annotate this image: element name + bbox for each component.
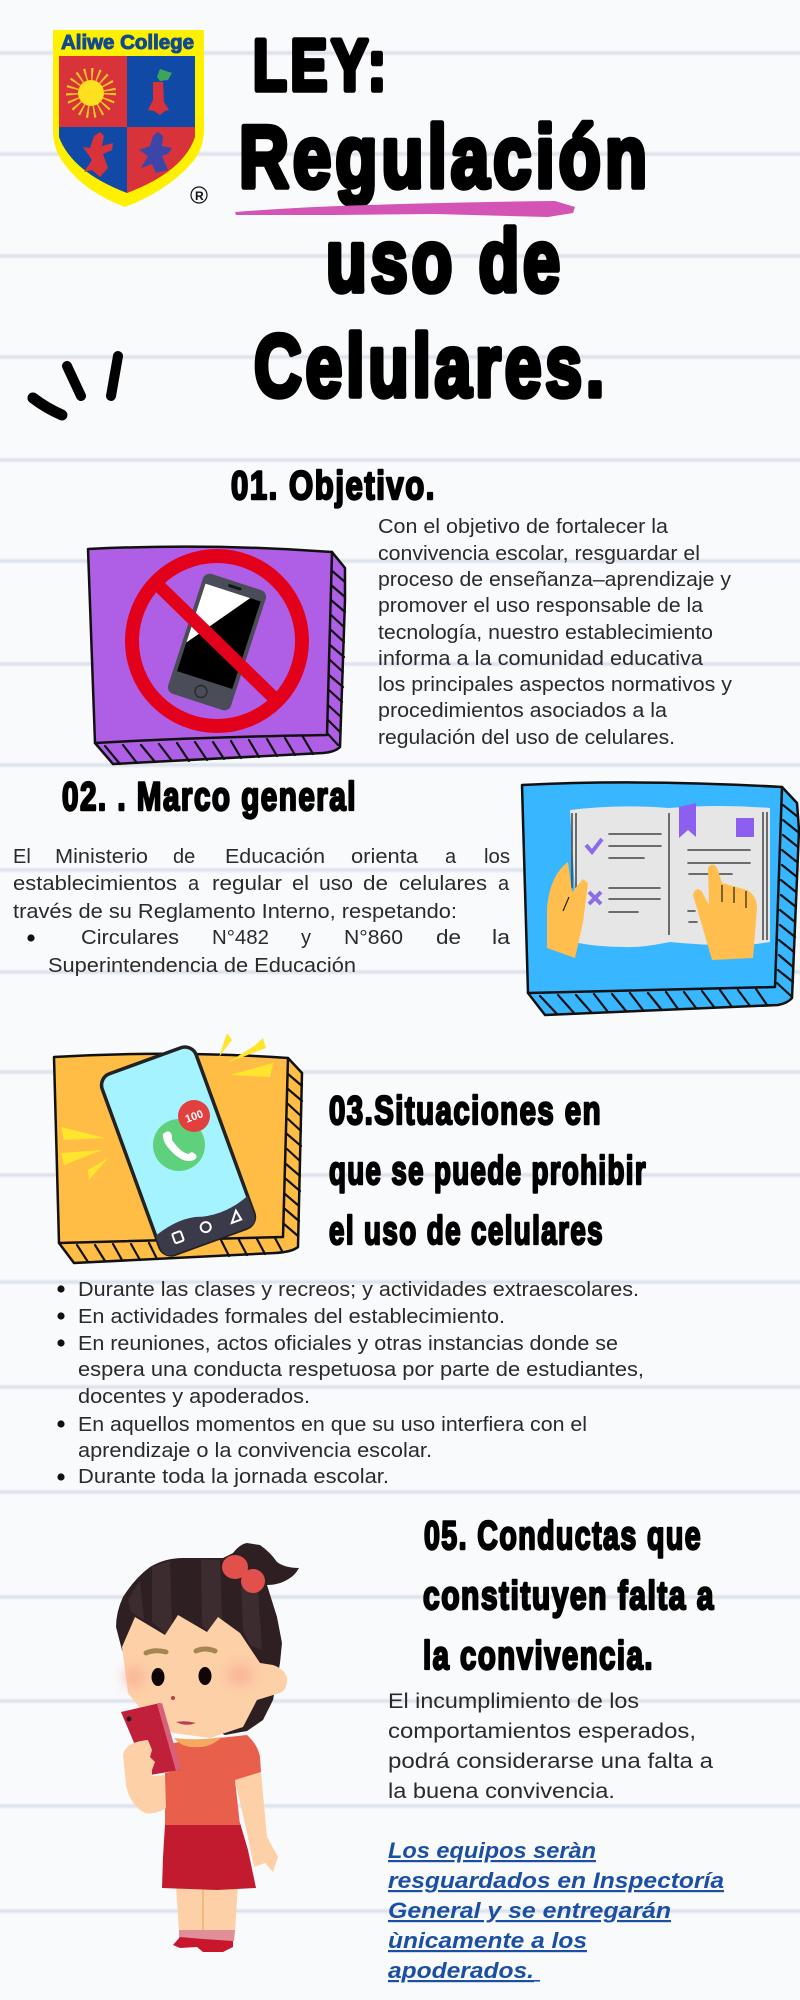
pink brush underline xyxy=(235,201,575,217)
text: conductas paragraph xyxy=(388,1690,713,1803)
list: situaciones: En actividades formales del establecimiento. xyxy=(78,1306,505,1328)
list: situaciones: docentes y apoderados. xyxy=(78,1386,310,1408)
skirt xyxy=(162,1823,256,1890)
callout: blue underlined note: ùnicamente a los xyxy=(388,1928,587,1953)
text: marco general paragraph: de xyxy=(363,873,388,895)
cheeks xyxy=(123,1666,145,1688)
text: marco general paragraph: a xyxy=(498,873,510,895)
callout: blue underlined note: apoderados. xyxy=(388,1958,534,1983)
list: situaciones: En aquellos momentos en que su uso interfiera con el xyxy=(78,1414,587,1436)
text: marco general paragraph: establecimientos xyxy=(13,873,177,895)
bullet list item: circulares: Superintendencia de Educación xyxy=(48,955,356,977)
text: objetivo paragraph: informa a la comunidad educativa xyxy=(378,648,704,670)
icon: left hand xyxy=(547,862,588,958)
bullet list item: circulares: N°482 xyxy=(212,927,269,949)
nose and mouth xyxy=(171,1696,175,1700)
title: LEY: xyxy=(253,26,390,106)
list: situaciones: espera una conducta respetuosa por parte de estudiantes, xyxy=(78,1359,644,1381)
right arm xyxy=(235,1772,278,1872)
text: marco general paragraph: de xyxy=(173,846,195,868)
text: objetivo paragraph: tecnología, nuestro establecimiento xyxy=(378,622,713,644)
text: objetivo paragraph: procedimientos asociados a la xyxy=(378,700,668,722)
callout: blue underlined note xyxy=(388,1838,724,1983)
icon: no phones purple box xyxy=(88,547,345,764)
icon: yellow sparks xyxy=(61,1033,273,1180)
title: uso de xyxy=(326,211,564,310)
heading: 03 situaciones: 03.Situaciones en xyxy=(329,1089,602,1133)
list: situaciones: Durante toda la jornada escolar. xyxy=(78,1466,389,1488)
title xyxy=(235,26,651,415)
text: marco general paragraph: Educación xyxy=(225,846,325,868)
text: conductas paragraph: la buena convivencia. xyxy=(388,1780,615,1803)
bullet list item: circulares: N°860 xyxy=(344,927,403,949)
heading: 02 marco general: 02. . Marco general xyxy=(62,775,357,819)
text: objetivo paragraph: promover el uso responsable de la xyxy=(378,595,704,617)
red hair bow xyxy=(222,1555,265,1593)
notification badge xyxy=(178,1100,210,1132)
socks xyxy=(179,1930,235,1941)
bullet list item: circulares: de xyxy=(436,927,461,949)
list: situaciones: Durante las clases y recreos; y actividades extraescolares. xyxy=(78,1279,639,1301)
heading: 03 situaciones: el uso de celulares xyxy=(329,1209,604,1253)
eyes xyxy=(152,1668,164,1686)
heading: 05 conductas: la convivencia. xyxy=(423,1634,654,1678)
red phone xyxy=(121,1703,181,1775)
text: conductas paragraph: comportamientos esperados, xyxy=(388,1720,696,1743)
text: objetivo paragraph: Con el objetivo de fortalecer la xyxy=(378,516,669,538)
text: objetivo paragraph xyxy=(378,516,732,749)
text: marco general paragraph: El xyxy=(13,846,31,868)
callout: blue underlined note: resguardados en Inspectoría xyxy=(388,1868,724,1893)
title: Celulares. xyxy=(254,316,608,415)
list: situaciones xyxy=(57,1279,644,1488)
bullet list item: circulares: y xyxy=(301,927,311,949)
text: marco general paragraph: a xyxy=(188,873,200,895)
icon: college shield logo: Aliwe College xyxy=(61,32,194,54)
icon: college shield logo: R xyxy=(195,189,204,203)
left hand and arm xyxy=(123,1740,166,1813)
face and ear xyxy=(122,1615,287,1738)
callout: blue underlined note: Los equipos seràn xyxy=(388,1838,596,1863)
bullet list item: circulares: la xyxy=(492,927,511,949)
text: marco general paragraph: uso xyxy=(319,873,353,895)
neck shadow xyxy=(174,1737,222,1747)
text: marco general paragraph: a xyxy=(445,846,457,868)
hair highlights xyxy=(128,1559,262,1650)
heading: 01 objetivo: 01. Objetivo. xyxy=(231,464,436,508)
notification badge: 100 xyxy=(184,1108,205,1126)
text: marco general paragraph: través de su Reglamento Interno, respetando: xyxy=(13,901,457,923)
heading: 03 situaciones: que se puede prohibir xyxy=(329,1149,647,1193)
illustration: girl looking at phone xyxy=(116,1543,299,1952)
icon: college shield logo xyxy=(53,30,207,207)
icon: smartphone xyxy=(166,572,268,712)
eyebrows xyxy=(146,1649,215,1653)
icon: right hand xyxy=(693,864,757,960)
shirt xyxy=(165,1735,261,1825)
icon: tilted smartphone xyxy=(98,1044,258,1258)
hair and ponytail xyxy=(116,1543,299,1735)
text: marco general paragraph: regular xyxy=(212,873,282,895)
bullet list item: circulares: Circulares xyxy=(81,927,179,949)
text: objetivo paragraph: regulación del uso de celulares. xyxy=(378,727,675,749)
text: marco general paragraph: los xyxy=(484,846,510,868)
text: objetivo paragraph: proceso de enseñanza–aprendizaje y xyxy=(378,569,731,591)
text: marco general paragraph: Ministerio xyxy=(55,846,148,868)
legs xyxy=(176,1885,238,1932)
icon: open book blue box xyxy=(522,782,799,1015)
text: marco general paragraph: celulares xyxy=(399,873,487,895)
bullet list item: circulares xyxy=(27,927,511,977)
text: conductas paragraph: El incumplimiento de los xyxy=(388,1690,639,1713)
text: marco general paragraph xyxy=(13,846,511,977)
heading: 03 situaciones xyxy=(329,1089,647,1253)
list: situaciones: aprendizaje o la convivencia escolar. xyxy=(78,1440,432,1462)
text: marco general paragraph: orienta xyxy=(351,846,419,868)
title: Regulación xyxy=(239,107,651,206)
text: marco general paragraph: el xyxy=(292,873,309,895)
callout: blue underlined note: General y se entregarán xyxy=(388,1898,671,1923)
list: situaciones: En reuniones, actos oficiales y otras instancias donde se xyxy=(78,1333,618,1355)
icon: green call button xyxy=(153,1119,205,1171)
icon: phone on orange box xyxy=(54,1033,302,1263)
heading: 05 conductas xyxy=(423,1514,715,1678)
decorative spark strokes xyxy=(33,356,118,415)
shoes xyxy=(173,1937,233,1952)
text: objetivo paragraph: convivencia escolar, resguardar el xyxy=(378,543,700,565)
text: objetivo paragraph: los principales aspectos normativos y xyxy=(378,674,732,696)
text: conductas paragraph: podrá considerarse una falta a xyxy=(388,1750,713,1773)
